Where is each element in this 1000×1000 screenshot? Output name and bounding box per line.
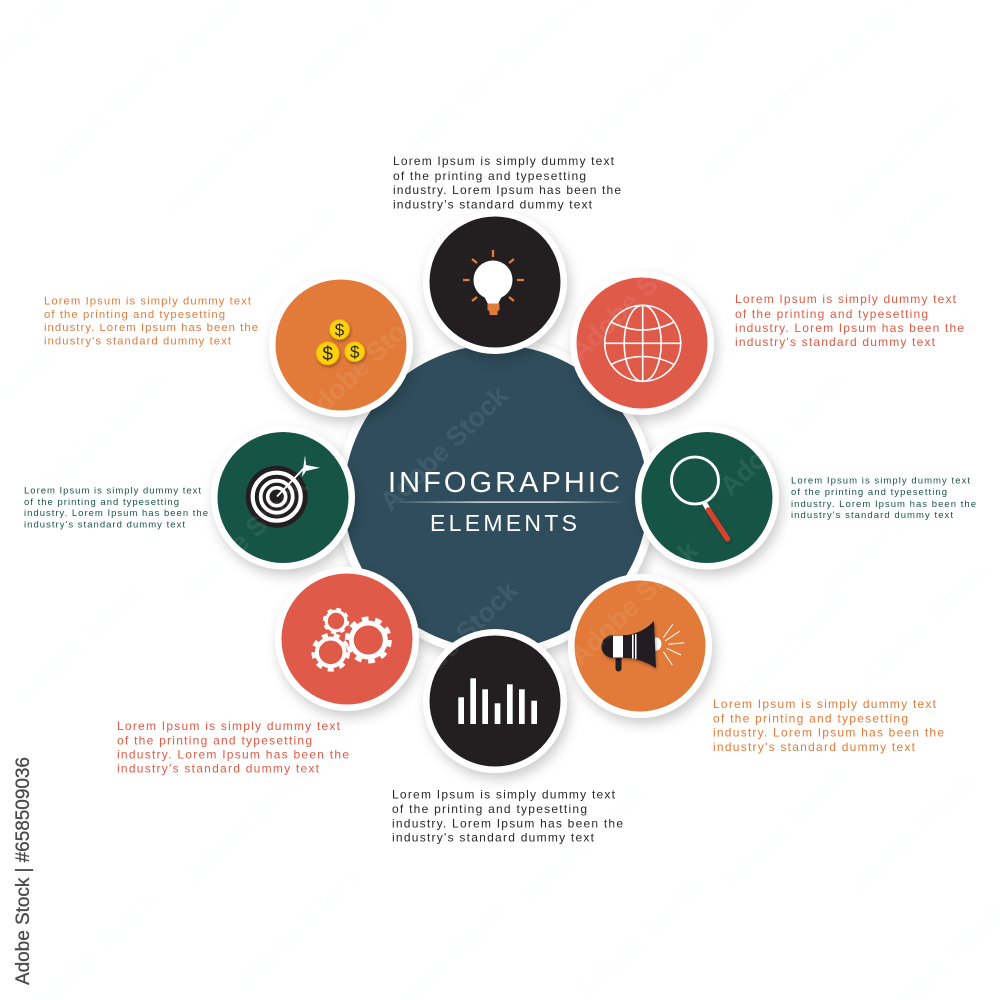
infographic canvas: Adobe Stock [814,180,954,317]
text block: bars: industry. Lorem Ipsum has been the [392,816,623,830]
infographic canvas: Adobe Stock [694,50,834,187]
icon: gears [313,609,389,670]
infographic canvas: Adobe Stock [34,365,174,502]
text block: magnifier: of the printing and typesetting [791,487,947,498]
text block: bars: industry's standard dummy text [392,830,595,844]
text block: target: Lorem Ipsum is simply dummy text [24,486,201,496]
text block: globe: Lorem Ipsum is simply dummy text [735,292,957,306]
infographic canvas: Adobe Stock [514,75,654,212]
text block: megaphone [713,697,944,754]
panel: megaphone circle [568,574,712,718]
infographic canvas: Adobe Stock [714,365,854,502]
text block: globe: of the printing and typesetting [735,307,928,321]
icon: magnifying glass [672,457,728,539]
panel: globe circle [570,271,714,415]
icon: megaphone [602,621,684,672]
panel: target circle [211,426,355,570]
infographic canvas: Adobe Stock [374,380,514,517]
infographic canvas: Adobe Stock [714,760,854,897]
infographic canvas: Adobe Stock [714,585,854,722]
icon: bar chart [458,678,537,724]
text block: globe: industry. Lorem Ipsum has been the [735,321,964,335]
infographic canvas: Adobe Stock [384,575,524,712]
infographic canvas: Adobe Stock [157,88,297,225]
text block: top: Lorem Ipsum is simply dummy text [393,154,615,168]
text block: coins: industry. Lorem Ipsum has been the [44,322,258,334]
text block: gears: industry's standard dummy text [117,762,320,776]
stock id label: Adobe Stock | #658509036 [13,757,34,985]
infographic canvas: Adobe Stock [9,575,149,712]
panel: gears circle [275,567,419,711]
infographic canvas: Adobe Stock [294,295,434,432]
text block: gears: Lorem Ipsum is simply dummy text [117,719,341,733]
infographic canvas: Adobe Stock [179,755,319,892]
text block: top [393,154,621,212]
text block: coins: Lorem Ipsum is simply dummy text [44,296,252,308]
text block: target: industry. Lorem Ipsum has been the [24,508,208,519]
text block: target: industry's standard dummy text [24,520,185,530]
text block: top: industry's standard dummy text [393,198,593,212]
text block: bars [392,788,623,844]
infographic canvas: Adobe Stock [844,765,984,902]
icon: dollar coins: $ [350,342,360,362]
infographic canvas: Adobe Stock [854,555,994,692]
panel: magnifier circle [635,426,779,570]
infographic canvas: Adobe Stock [514,775,654,912]
icon: dollar coins [316,320,365,365]
text block: megaphone: industry's standard dummy text [713,740,916,754]
panel: bars circle [423,629,567,773]
infographic canvas: Adobe Stock [229,860,369,997]
central circle [336,337,656,657]
text block: gears: of the printing and typesetting [117,734,312,748]
central title: ELEMENTS [430,510,577,536]
text block: megaphone: Lorem Ipsum is simply dummy text [713,697,937,711]
text block: target: of the printing and typesetting [24,497,179,508]
text block: target [24,486,208,530]
central title [388,467,624,536]
text block: gears [117,719,349,776]
text block: gears: industry. Lorem Ipsum has been the [117,748,349,762]
text block: coins: industry's standard dummy text [44,336,232,348]
text block: megaphone: of the printing and typesetting [713,712,908,726]
infographic canvas: Adobe Stock [824,90,964,227]
text block: magnifier: industry. Lorem Ipsum has been the [791,499,976,510]
infographic canvas: Adobe Stock [204,200,344,337]
text block: magnifier [791,476,976,521]
panel: coins circle [269,273,413,417]
infographic canvas: Adobe Stock [32,48,172,185]
text block: globe: industry's standard dummy text [735,335,936,349]
text block: magnifier: Lorem Ipsum is simply dummy text [791,476,970,486]
icon: globe [605,305,681,381]
text block: coins [44,296,258,348]
text block: coins: of the printing and typesetting [44,309,225,321]
text block: top: of the printing and typesetting [393,169,586,183]
icon: light bulb [463,250,524,315]
infographic canvas: Adobe Stock [814,465,954,602]
icon: dollar coins: $ [335,320,345,340]
panel: bulb circle [423,210,567,354]
text block: magnifier: industry's standard dummy text [791,510,953,521]
infographic canvas: Adobe Stock [384,40,524,177]
icon: dollar coins: $ [322,344,333,365]
text block: globe [735,292,964,349]
text block: top: industry. Lorem Ipsum has been the [393,183,621,197]
text block: bars: Lorem Ipsum is simply dummy text [392,788,616,802]
infographic canvas: Adobe Stock [564,230,704,367]
central title: INFOGRAPHIC [388,467,620,499]
text block: megaphone: industry. Lorem Ipsum has been the [713,726,944,740]
infographic canvas: Adobe Stock [174,470,314,607]
infographic canvas: Adobe Stock [564,535,704,672]
text block: bars: of the printing and typesetting [392,802,587,816]
icon: target with arrow [246,455,320,528]
